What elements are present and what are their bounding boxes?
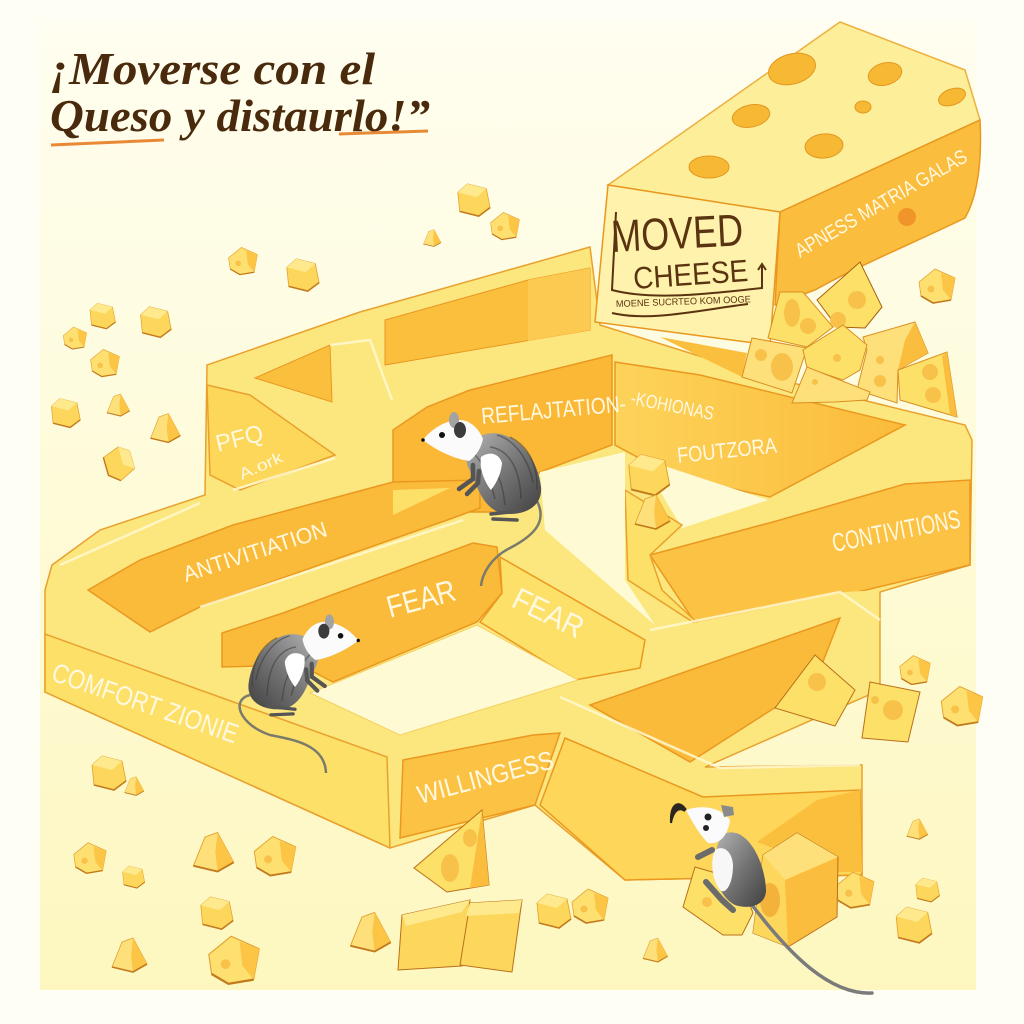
wall: contivitions end cap (625, 490, 705, 630)
wall: lower right (540, 738, 862, 880)
pile cube 3 (857, 322, 928, 403)
body (248, 614, 360, 715)
mouse: on cheese (671, 804, 872, 993)
gap: center upper (540, 452, 655, 625)
maze labels: COMFORT ZIONIE (48, 657, 242, 749)
maze labels: FEAR (507, 581, 590, 645)
big cheese wedge (595, 22, 980, 345)
chunk: big cube (753, 833, 838, 947)
inner wall: upper pocket lighter end (528, 268, 590, 341)
inner wall: reflaj right (615, 362, 905, 497)
gap: beside cap (650, 590, 880, 632)
moved cheese sign (610, 204, 766, 316)
wall: PFQ panel (207, 385, 335, 490)
gap: center lower (310, 625, 578, 735)
body (715, 832, 766, 907)
moved cheese sign: CHEESE (632, 253, 749, 296)
chest (712, 848, 733, 891)
wall: willingness (400, 733, 560, 838)
head (686, 807, 730, 843)
maze labels: FOUTZORA (676, 433, 778, 468)
pile cube 4 (898, 352, 957, 417)
scattered cheese crumbs (51, 184, 983, 984)
pile cube 5 (742, 338, 807, 393)
mouse: upper (421, 412, 541, 586)
moved cheese sign: MOENE SUCRTEO KOM OOGE (616, 294, 751, 310)
cheese top face (608, 22, 980, 212)
maze labels: CONTIVITIONS (829, 504, 963, 558)
title: ¡Moverse con el (50, 43, 375, 94)
inner wall: lower right (590, 618, 840, 762)
maze labels (48, 388, 963, 810)
cheese holes (689, 48, 968, 178)
maze labels: REFLAJTATION- (480, 390, 627, 429)
pile cube 1 (768, 292, 833, 347)
maze labels: ANTIVITIATION (180, 517, 330, 587)
snout curl (671, 804, 686, 823)
pile cube 2 (817, 262, 882, 328)
tail (752, 905, 872, 993)
large cheese chunks (398, 655, 920, 972)
paw and leg (698, 850, 733, 910)
body (421, 412, 541, 520)
inner wall: upper left pocket (255, 345, 332, 402)
wall: comfort zone (45, 634, 390, 848)
ear (721, 805, 734, 817)
maze top surface (45, 247, 972, 880)
maze labels: A.ork (237, 449, 287, 484)
inner wall: reflaj central (393, 355, 612, 512)
shadow under cheese wedge (660, 337, 747, 377)
inner wall: antivitiation (88, 480, 480, 632)
cheese front label face (595, 185, 780, 345)
cheese pile (742, 262, 957, 417)
eye patches (703, 814, 712, 831)
inner wall: upper pocket (385, 268, 590, 365)
light wedge (393, 488, 450, 515)
inner wall: fear (222, 543, 502, 682)
chunk: under rat (683, 867, 753, 935)
maze labels: FEAR (383, 573, 459, 625)
maze labels: WILLINGESS (414, 745, 557, 810)
cheese maze (45, 247, 972, 880)
mouse: lower left (240, 614, 360, 773)
wall: contivitions (650, 480, 970, 630)
cheese side face (775, 120, 980, 305)
wall: second fear (480, 557, 645, 680)
chunk: right of maze large (775, 655, 855, 726)
side hole (898, 208, 916, 226)
chunk: front pair left (398, 900, 470, 970)
title (50, 43, 430, 145)
maze highlight strokes (60, 340, 880, 768)
chunk: center front (414, 810, 489, 892)
tail (481, 496, 541, 586)
chunk: right of maze cube (862, 682, 920, 742)
wall: lower right shaded part (757, 790, 862, 872)
pile cube 7 (792, 367, 870, 403)
gap: right of center (640, 458, 768, 528)
chunk: front pair right (460, 900, 522, 972)
side label: APNESS MATRIA GALAS (792, 146, 971, 262)
maze labels: -KOHIONAS (629, 388, 716, 425)
pile cube 6 (803, 325, 867, 380)
moved cheese sign: MOVED (610, 204, 744, 262)
title: Queso y distaurlo!” (50, 90, 430, 141)
maze labels: PFQ (213, 420, 266, 458)
tail (240, 695, 326, 773)
